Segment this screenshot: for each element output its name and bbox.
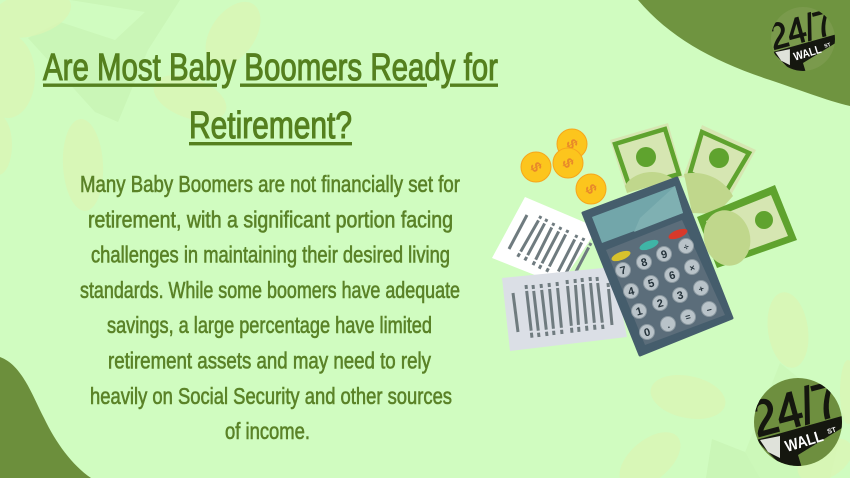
- body paragraph: savings, a large percentage have limited: [107, 312, 432, 338]
- icon: calculator: 7: [619, 264, 628, 278]
- body paragraph: [80, 171, 460, 444]
- body paragraph: standards. While some boomers have adequate: [80, 277, 460, 303]
- icon: gold coins: $: [558, 155, 577, 172]
- corner blob: top right: [638, 0, 850, 106]
- icon: calculator: +: [697, 283, 705, 294]
- logo: bottom right 24/7 Wall St: ST: [827, 426, 838, 436]
- icon: calculator: .: [666, 320, 671, 330]
- icon: gold coins: [521, 129, 606, 204]
- title: Are Most Baby Boomers Ready for: [43, 47, 498, 89]
- corner blob: bottom left: [0, 357, 91, 478]
- icon: calculator: ×: [688, 262, 696, 273]
- icon: calculator: 0: [643, 326, 652, 340]
- body paragraph: Many Baby Boomers are not financially set for: [80, 171, 460, 197]
- icon: gold coins: $: [526, 159, 545, 176]
- logo: bottom right 24/7 Wall St: WALL: [783, 428, 826, 456]
- icon: banknote right: [697, 185, 797, 271]
- icon: grey receipt: [502, 267, 627, 351]
- icon: calculator: ÷: [683, 241, 690, 252]
- icon: calculator: 1: [635, 305, 644, 319]
- icon: calculator: 8: [640, 256, 649, 270]
- logo: top right 24/7 Wall St: WALL: [792, 43, 823, 64]
- icon: banknote left: [610, 123, 683, 193]
- body paragraph: retirement assets and may need to rely: [108, 348, 431, 374]
- logo: top right 24/7 Wall St: ST: [824, 42, 832, 50]
- icon: calculator: =: [684, 311, 692, 323]
- icon: calculator: 3: [676, 289, 685, 303]
- illustration: money, receipts and calculator: [492, 123, 797, 355]
- body paragraph: heavily on Social Security and other sources: [90, 383, 452, 409]
- icon: banknote middle: [683, 125, 756, 214]
- icon: calculator: 4: [627, 285, 637, 299]
- icon: calculator: −: [705, 304, 713, 315]
- icon: calculator: 2: [656, 297, 665, 311]
- icon: calculator: 6: [668, 269, 677, 283]
- title: Retirement?: [189, 105, 352, 147]
- title: [43, 47, 498, 147]
- body paragraph: of income.: [225, 418, 310, 444]
- body paragraph: retirement, with a significant portion facing: [88, 206, 453, 232]
- icon: calculator: [583, 178, 732, 355]
- logo: top right 24/7 Wall St: 24/7: [765, 1, 837, 58]
- icon: gold coins: $: [581, 181, 600, 198]
- icon: calculator: 5: [647, 277, 656, 291]
- icon: white receipt: [492, 197, 598, 285]
- body paragraph: challenges in maintaining their desired living: [91, 242, 450, 268]
- icon: gold coins: $: [562, 136, 581, 153]
- logo: top right 24/7 Wall St: [771, 7, 835, 71]
- icon: calculator: 9: [660, 248, 669, 262]
- logo: bottom right 24/7 Wall St: [754, 378, 842, 466]
